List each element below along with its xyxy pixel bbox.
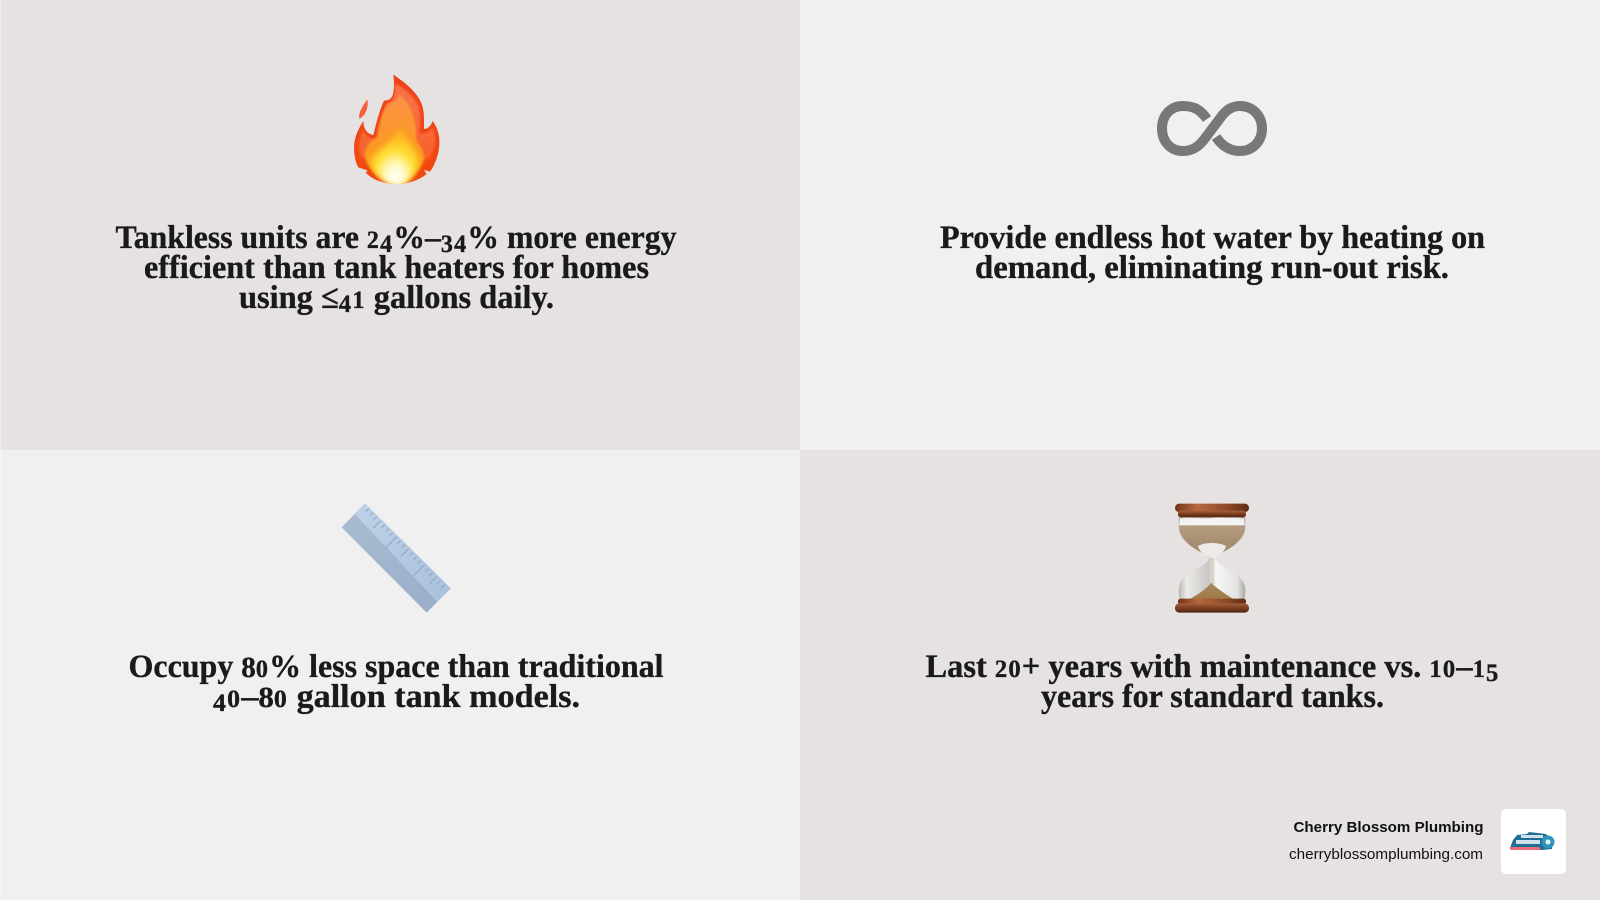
brand url: cherryblossomplumbing.com	[1289, 846, 1483, 863]
logo card	[1501, 809, 1566, 874]
heading: space saving text: –80 gallon tank models.	[241, 679, 570, 715]
heading: space saving text: 4	[213, 690, 227, 717]
heading: space saving text: 0	[227, 686, 241, 713]
heading: energy efficiency text: %–	[393, 220, 441, 256]
icon: fire	[354, 74, 439, 187]
heading: energy efficiency text: gallons daily.	[374, 280, 557, 316]
heading: energy efficiency text: 4	[380, 231, 393, 258]
heading: lifespan text: years for standard tanks.	[1041, 679, 1384, 715]
heading: endless hot water text: Provide endless hot water by heating on	[940, 220, 1485, 256]
heading: energy efficiency text: 1	[352, 287, 366, 314]
heading: energy efficiency text: efficient than tank heaters for homes	[144, 250, 649, 286]
panel: endless hot water	[800, 0, 1600, 450]
heading: lifespan text: Last 20+ years with maintenance vs. 10–1	[926, 649, 1486, 685]
heading: energy efficiency text: 34	[441, 231, 467, 258]
panel: energy efficiency	[0, 0, 800, 450]
icon: ruler	[342, 503, 451, 613]
heading: lifespan text: 5	[1486, 660, 1500, 687]
heading: energy efficiency text: more energy	[507, 220, 684, 256]
heading: energy efficiency text: Tankless units are 2	[116, 220, 381, 256]
heading: energy efficiency text: %	[467, 220, 499, 256]
heading: lifespan text	[926, 649, 1500, 715]
glass bulbs	[1179, 517, 1245, 600]
icon: infinity	[1162, 106, 1262, 151]
panel: space saving	[0, 450, 800, 900]
icon: hourglass	[1175, 504, 1249, 613]
brand name: Cherry Blossom Plumbing	[1294, 819, 1484, 836]
brand block	[1289, 809, 1566, 874]
heading: energy efficiency text	[116, 220, 677, 318]
panel: lifespan	[800, 450, 1600, 900]
heading: energy efficiency text: using ≤	[239, 280, 341, 316]
heading: space saving text	[128, 649, 664, 717]
heading: endless hot water text	[940, 220, 1485, 286]
heading: energy efficiency text: 4	[339, 291, 352, 318]
heading: space saving text: Occupy 80% less space than traditional	[128, 649, 664, 685]
heading: endless hot water text: demand, eliminating run-out risk.	[975, 250, 1449, 286]
